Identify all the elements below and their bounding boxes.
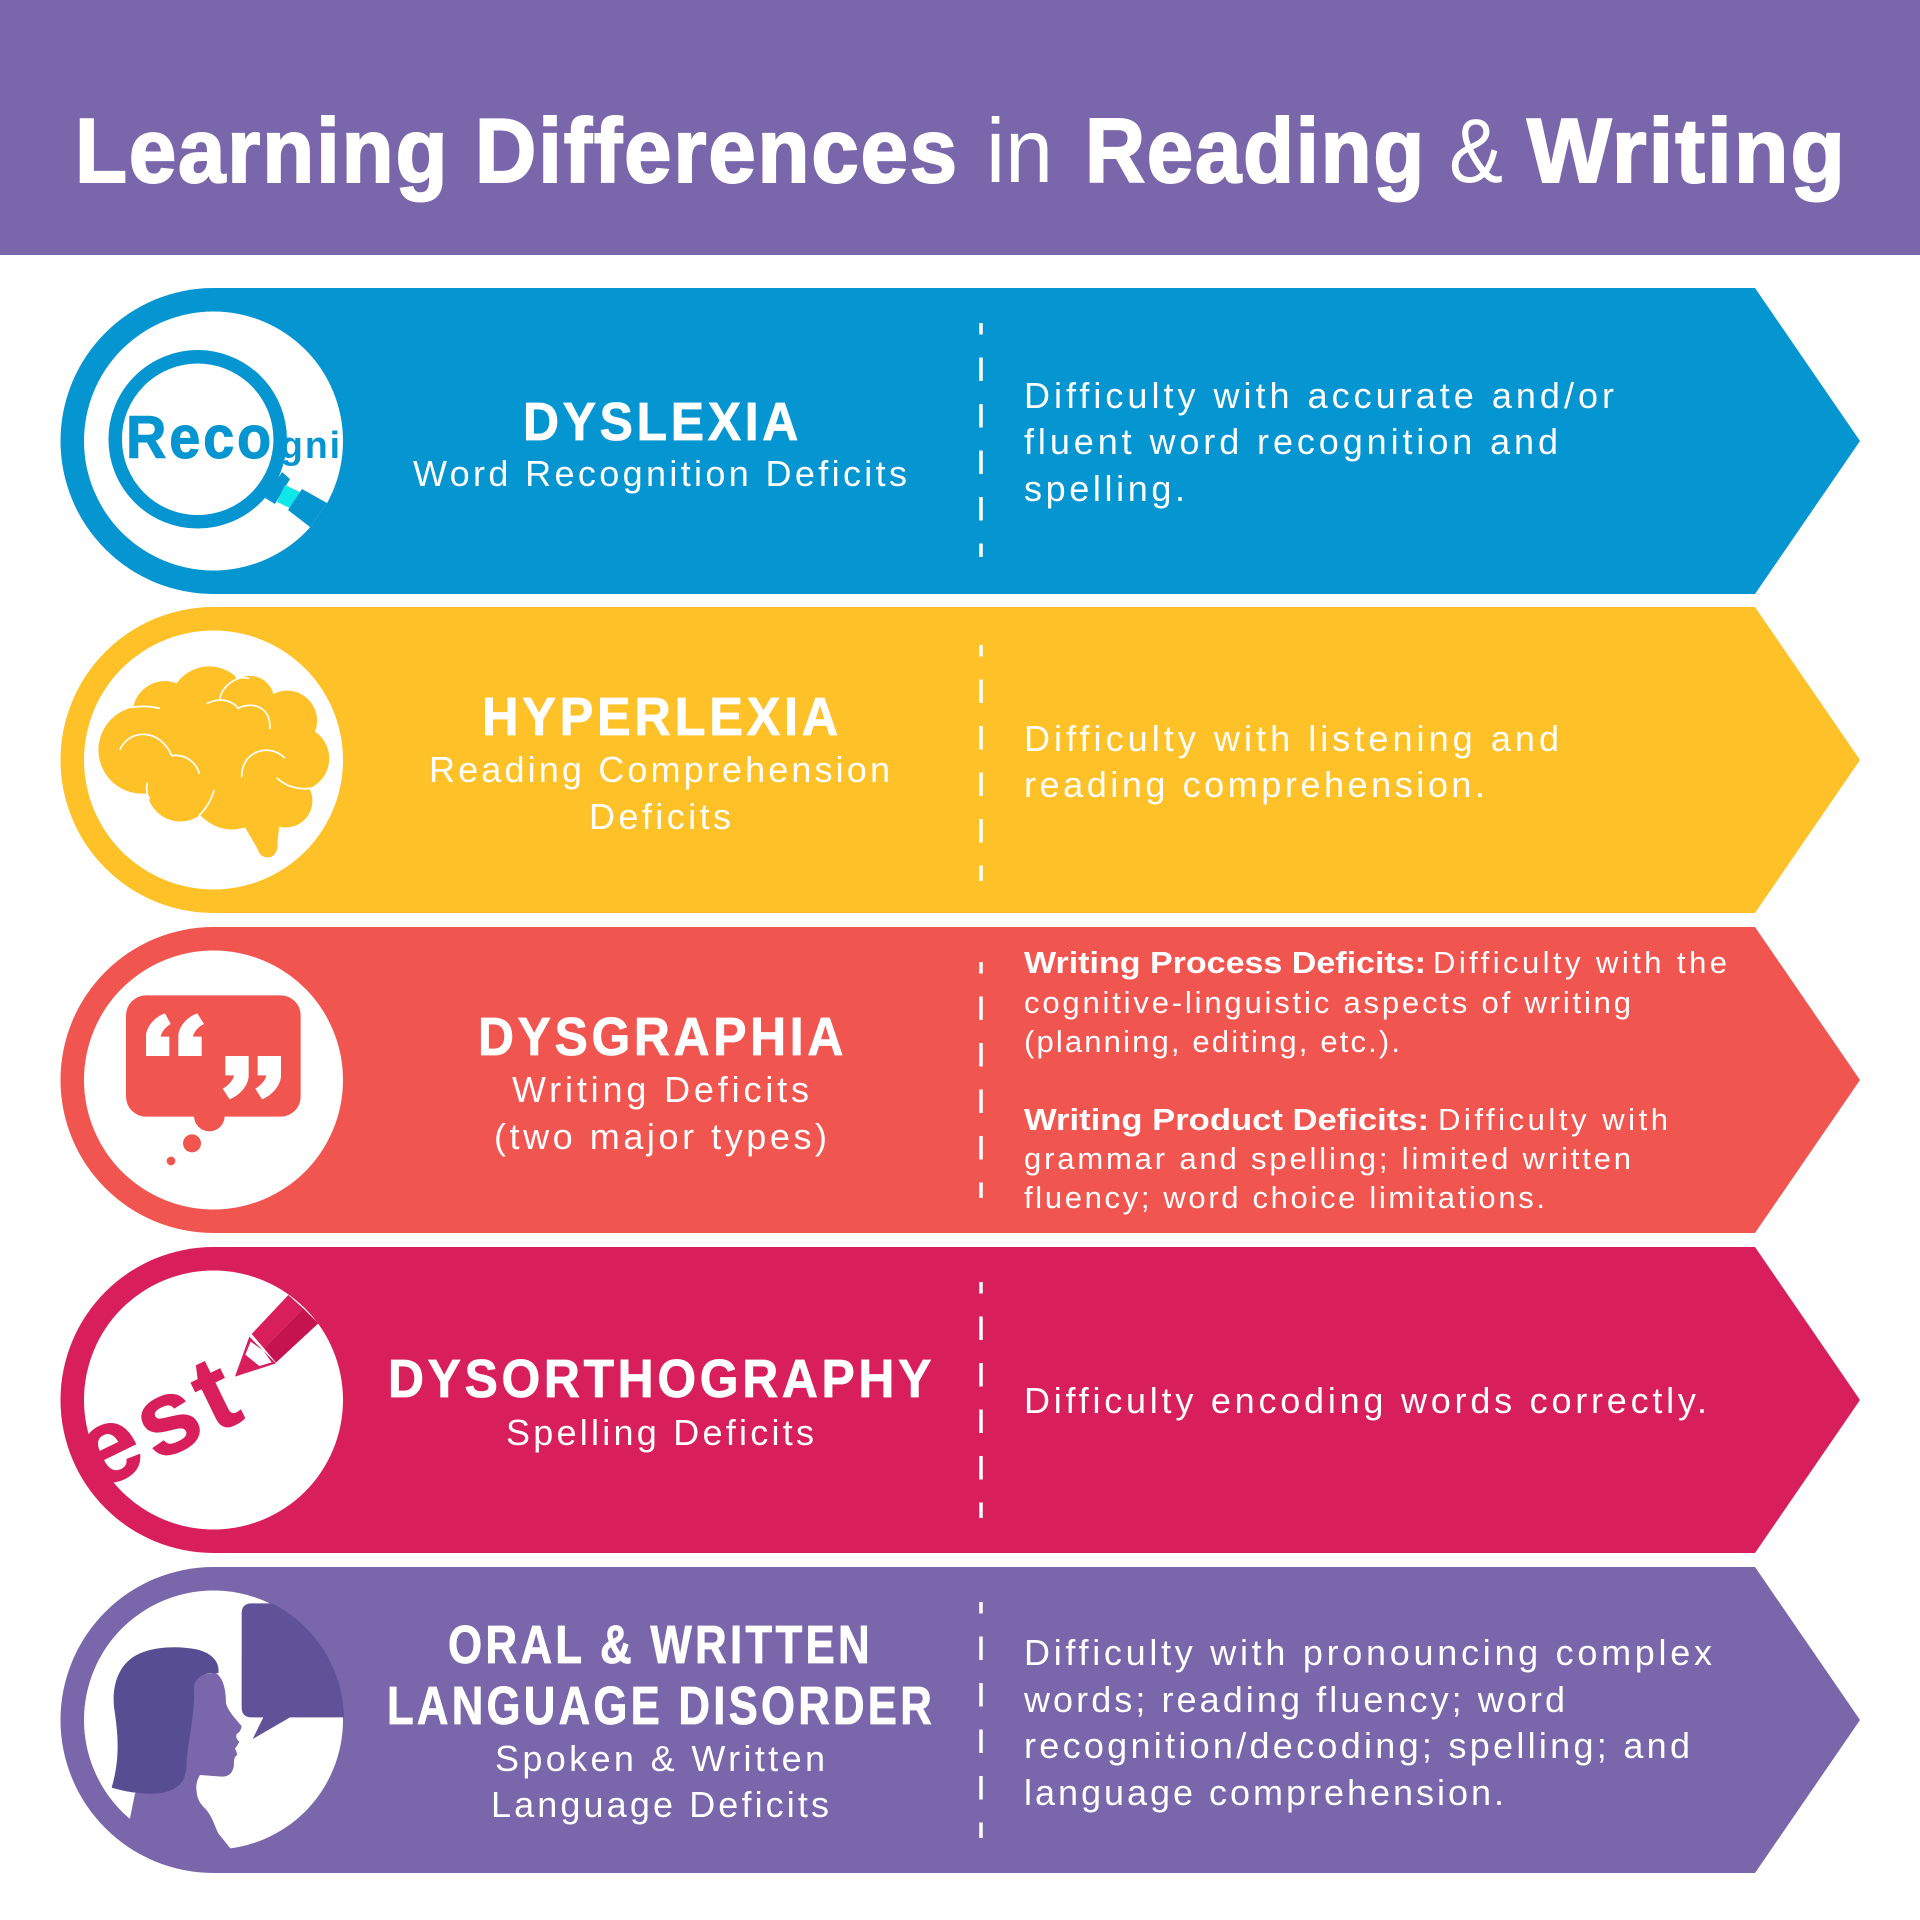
description: writing process deficits: Difficulty with the — [1433, 945, 1727, 980]
divider — [979, 323, 983, 557]
icon: magnifying glass over word: gni — [280, 425, 342, 467]
title: Reading — [1085, 101, 1426, 202]
description: writing process deficits: (planning, editing, etc.). — [1024, 1024, 1400, 1059]
subheading: spoken and written language deficits: Spoken & Written — [495, 1738, 825, 1779]
divider — [979, 1282, 983, 1518]
divider — [979, 1602, 983, 1838]
description: writing process deficits: cognitive-linguistic aspects of writing — [1024, 985, 1631, 1020]
description: oral and written language disorder: language comprehension. — [1024, 1772, 1504, 1813]
title: Writing — [1527, 101, 1847, 202]
icon: pencil writing word — [55, 1295, 318, 1512]
panel: oral and written language disorder — [60, 1567, 1860, 1873]
icon: magnifying glass over word: Reco — [126, 404, 274, 471]
heading: dysorthography: DYSORTHOGRAPHY — [388, 1349, 935, 1409]
description: hyperlexia: Difficulty with listening and — [1024, 718, 1559, 759]
description: oral and written language disorder: recognition/decoding; spelling; and — [1024, 1725, 1690, 1766]
description: writing product deficits: fluency; word choice limitations. — [1024, 1180, 1545, 1215]
subheading: writing deficits — [494, 1069, 827, 1157]
panel: dysorthography — [55, 1247, 1860, 1553]
subheading: writing deficits: Writing Deficits — [512, 1069, 809, 1110]
heading: oral and written language disorder — [387, 1615, 935, 1736]
description: dysorthography: Difficulty encoding words correctly. — [1024, 1380, 1707, 1421]
icon: thought bubble with quotes — [126, 995, 301, 1165]
subheading: writing deficits: (two major types) — [494, 1116, 827, 1157]
panel: dyslexia — [60, 288, 1860, 594]
heading: oral and written language disorder: ORAL & WRITTEN — [448, 1615, 873, 1675]
description: writing process deficits — [1024, 945, 1727, 1059]
divider — [979, 645, 983, 881]
title: Learning Differences — [75, 101, 959, 202]
subheading: reading comprehension deficits: Deficits — [589, 796, 731, 837]
description: dyslexia: spelling. — [1024, 468, 1185, 509]
description: hyperlexia — [1024, 718, 1559, 805]
heading: hyperlexia: HYPERLEXIA — [482, 687, 842, 747]
description: dyslexia — [1024, 375, 1614, 509]
icon: magnifying glass over word — [115, 357, 380, 560]
panel: hyperlexia — [60, 607, 1860, 913]
icon: speaking head with speech bubble — [112, 1603, 347, 1870]
title: & — [1449, 101, 1503, 202]
description: dyslexia: Difficulty with accurate and/or — [1024, 375, 1614, 416]
description: dyslexia: fluent word recognition and — [1024, 421, 1558, 462]
title — [75, 101, 1847, 202]
description: writing product deficits: grammar and spelling; limited written — [1024, 1141, 1631, 1176]
heading: dyslexia: DYSLEXIA — [523, 392, 802, 452]
title: in — [986, 101, 1053, 202]
description: oral and written language disorder: words; reading fluency; word — [1023, 1679, 1565, 1720]
subheading: spoken and written language deficits: Language Deficits — [491, 1784, 829, 1825]
subheading: spelling deficits: Spelling Deficits — [506, 1412, 814, 1453]
description: writing product deficits — [1024, 1102, 1668, 1215]
subheading: spoken and written language deficits — [491, 1738, 829, 1825]
header banner — [0, 0, 1920, 255]
description: writing process deficits: Writing Process Deficits: — [1024, 945, 1426, 980]
description: hyperlexia: reading comprehension. — [1024, 764, 1485, 805]
divider — [979, 962, 983, 1198]
heading: dysgraphia: DYSGRAPHIA — [478, 1007, 847, 1067]
subheading: reading comprehension deficits: Reading Comprehension — [429, 749, 890, 790]
description: writing product deficits: Writing Product Deficits: — [1024, 1102, 1429, 1137]
icon: pencil writing word: est — [55, 1333, 256, 1512]
description: writing product deficits: Difficulty with — [1438, 1102, 1668, 1137]
subheading: reading comprehension deficits — [429, 749, 890, 837]
panel: dysgraphia — [60, 927, 1860, 1233]
description: oral and written language disorder — [1023, 1632, 1712, 1813]
subheading: word recognition deficits: Word Recognition Deficits — [413, 453, 907, 494]
heading: oral and written language disorder: LANGUAGE DISORDER — [387, 1676, 935, 1736]
description: oral and written language disorder: Difficulty with pronouncing complex — [1024, 1632, 1712, 1673]
icon: brain — [98, 666, 329, 857]
